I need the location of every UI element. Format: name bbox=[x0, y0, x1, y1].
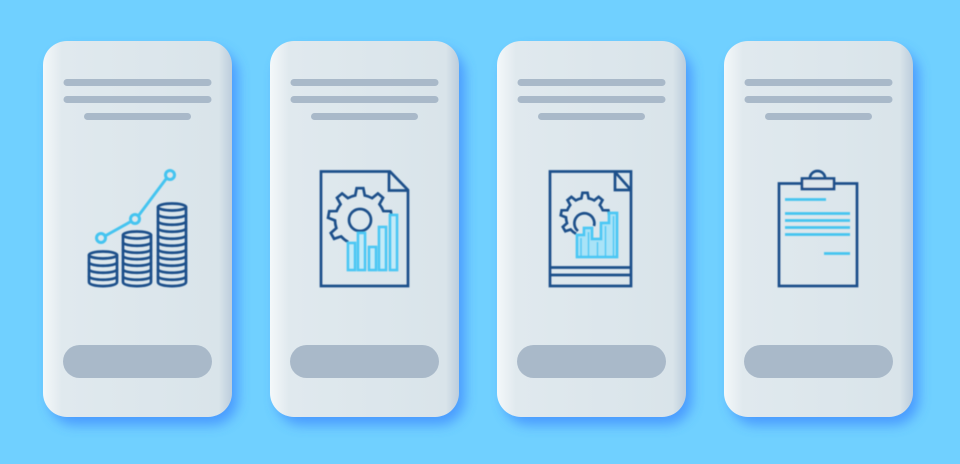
icon: report page with gear and bars bbox=[321, 172, 408, 286]
coin stack tall bbox=[158, 204, 186, 286]
panel: card 1 coins and growth line bbox=[43, 41, 238, 425]
clip bbox=[802, 178, 834, 189]
trend line bbox=[96, 170, 174, 242]
panel: card 3 annual report with gear and chart bbox=[497, 41, 692, 425]
coin stack medium bbox=[123, 232, 151, 286]
gear bbox=[561, 193, 609, 234]
bar chart bbox=[577, 213, 617, 257]
bar chart bbox=[348, 215, 397, 270]
text lines bbox=[785, 200, 850, 254]
page outline bbox=[550, 172, 631, 286]
icon: coin stacks with rising trend line bbox=[89, 170, 186, 286]
icon: clipboard bbox=[779, 171, 857, 286]
coin stack small bbox=[89, 252, 117, 286]
gear bbox=[328, 188, 392, 242]
panel: card 2 document with gear and chart bbox=[270, 41, 465, 425]
footer lines bbox=[550, 268, 631, 275]
board bbox=[779, 184, 857, 286]
page outline bbox=[321, 172, 408, 286]
icon: report with footer lines bbox=[550, 172, 631, 286]
panel: card 4 clipboard bbox=[724, 41, 919, 425]
